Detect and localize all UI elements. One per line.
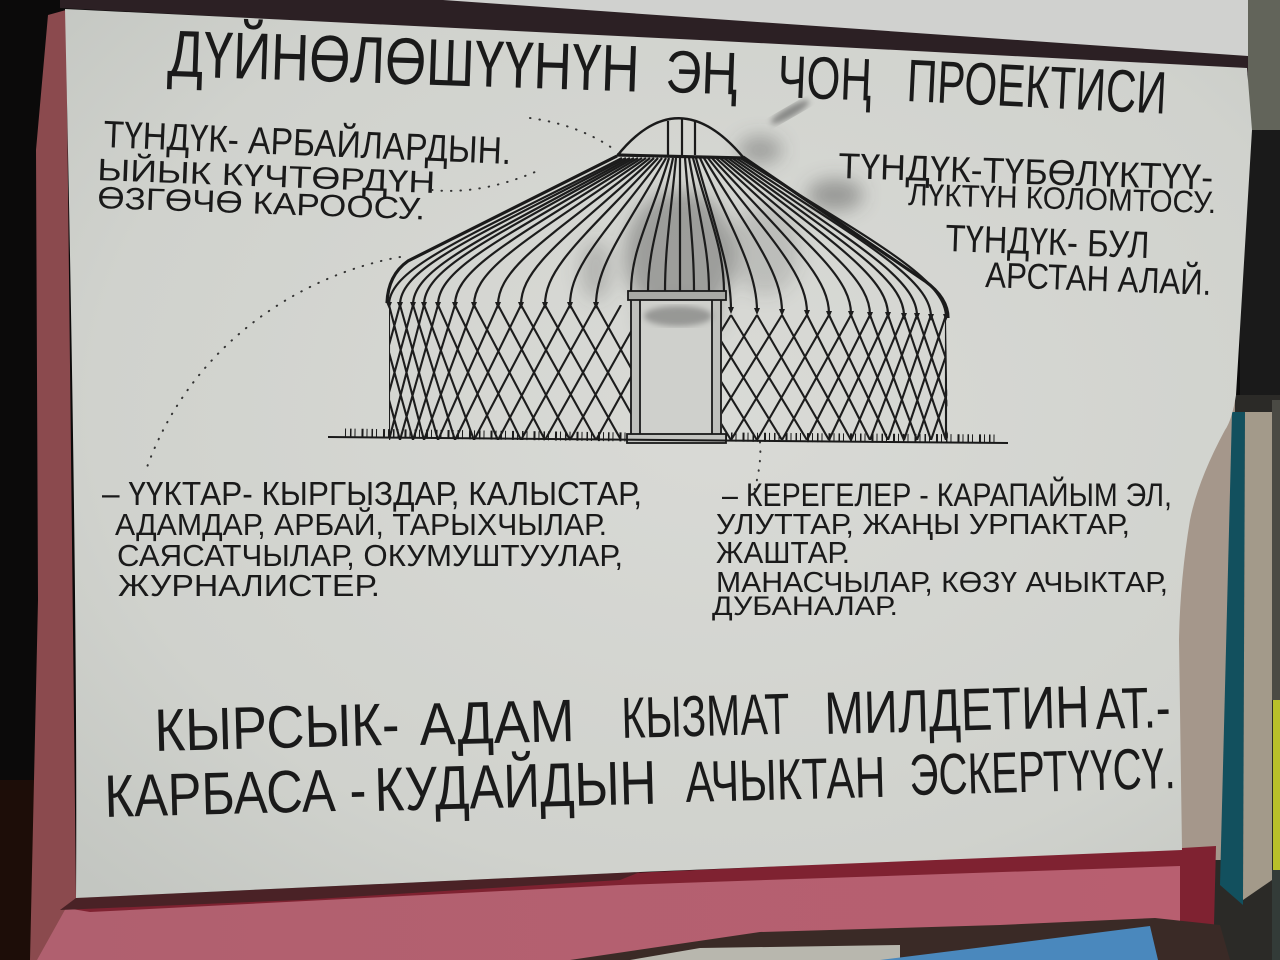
right shelf: taupe, teal and beige strips (1170, 130, 1280, 960)
line 1: word 1: КЫРСЫК- (154, 691, 400, 764)
text block: middle left (uuktar) (102, 475, 642, 603)
crown (tunduk) (617, 118, 744, 158)
soot smudges around yurt (580, 136, 863, 333)
title word 3: ЧОҢ (777, 43, 873, 114)
yurt illustration (328, 118, 1008, 443)
door frame (627, 291, 726, 443)
text block: top right (838, 145, 1217, 303)
line 1: ТҮНДҮК-ТҮБӨЛҮКТҮҮ- (838, 145, 1214, 198)
line 1: – ҮҮКТАР- КЫРГЫЗДАР, КАЛЫСТАР, (102, 475, 642, 512)
line 1: ТҮНДҮК- АРБАЙЛАРДЫН. (103, 111, 512, 173)
line 4: АРСТАН АЛАЙ. (985, 253, 1212, 303)
line 2: ЫЙЫК КҮЧТӨРДҮН (97, 151, 436, 200)
dotted guide lines (146, 118, 760, 495)
title word 2: ЭҢ (665, 38, 739, 107)
line 4: ЖУРНАЛИСТЕР. (118, 568, 380, 603)
roof outline (387, 156, 948, 318)
top sheet above poster (60, 0, 1280, 130)
line 1: word 5: АТ.- (1095, 675, 1171, 742)
line 1: word 4: МИЛДЕТИН (824, 673, 1090, 747)
text block: top left (97, 111, 512, 226)
smudge in door top (644, 306, 712, 326)
closing statement (104, 673, 1176, 830)
roof poles: right (696, 158, 946, 317)
title word 1: ДҮЙНӨЛӨШҮҮНҮН (167, 15, 641, 106)
line 5: ДУБАНАЛАР. (712, 591, 898, 621)
line 2: ЛҮКТҮН КОЛОМТОСУ. (908, 177, 1217, 220)
lattice wall: right (722, 314, 948, 440)
line 3: ТҮНДҮК- БУЛ (945, 218, 1150, 267)
line 2: УЛУТТАР, ЖАҢЫ УРПАКТАР, (716, 509, 1130, 541)
roof poles: left (389, 158, 666, 305)
line 2: word 1: КАРБАСА - (104, 756, 367, 830)
line 3: ӨЗГӨЧӨ КАРООСУ. (97, 180, 426, 226)
line 1: word 3: КЫЗМАТ (621, 682, 790, 751)
lattice wall: left (389, 305, 630, 440)
line 2: word 3: АЧЫКТАН (685, 745, 886, 815)
line 3: САЯСАТЧЫЛАР, ОКУМУШТУУЛАР, (117, 538, 623, 573)
line 2: word 2: КУДАЙДЫН (374, 748, 657, 825)
line 3: ЖАШТАР. (716, 535, 850, 570)
text block: middle right (keregeler) (712, 477, 1172, 621)
ground and grass (328, 433, 1008, 443)
line 4: МАНАСЧЫЛАР, КӨЗҮ АЧЫКТАР, (716, 567, 1168, 599)
blue and white items at the bottom edge (570, 918, 1230, 960)
title word 4: ПРОЕКТИСИ (905, 47, 1168, 127)
title (167, 15, 1168, 127)
background: wooden left edge (0, 780, 38, 960)
line 2: АДАМДАР, АРБАЙ, ТАРЫХЧЫЛАР. (115, 506, 607, 542)
roof poles: centre, ending on the door lintel (631, 158, 724, 292)
smudge near title (768, 97, 812, 127)
line 1: – КЕРЕГЕЛЕР - КАРАПАЙЫМ ЭЛ, (722, 477, 1172, 513)
line 1: word 2: АДАМ (419, 687, 575, 758)
